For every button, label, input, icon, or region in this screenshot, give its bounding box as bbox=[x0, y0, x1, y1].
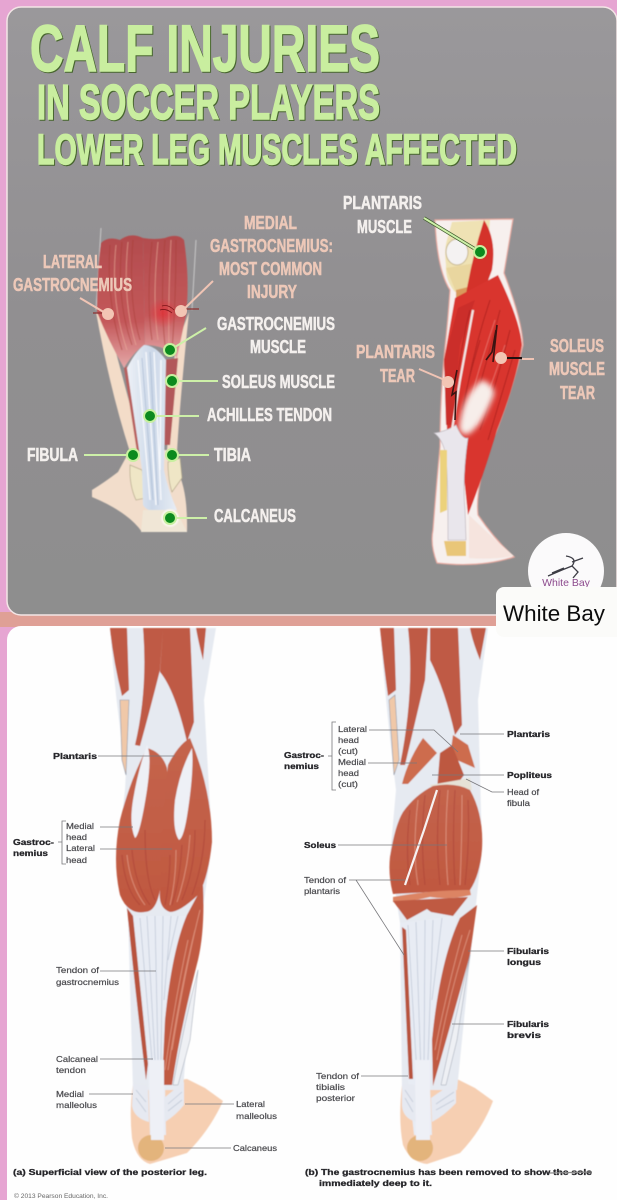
label: calcaneal tendon: tendon bbox=[56, 1065, 86, 1075]
callout: medial gastrocnemius: GASTROCNEMIUS: bbox=[210, 235, 333, 256]
label: gastrocnemius cut heads: (cut) bbox=[338, 746, 358, 756]
label: tendon of gastrocnemius: gastrocnemius bbox=[56, 977, 119, 987]
label: gastrocnemius bracket: Lateral bbox=[66, 843, 95, 853]
label: tendon of gastrocnemius bbox=[56, 965, 156, 987]
callout: medial gastrocnemius: INJURY bbox=[247, 281, 297, 302]
label: calcaneal tendon bbox=[56, 1054, 153, 1075]
label: gastrocnemius cut heads: nemius bbox=[284, 761, 319, 771]
white aponeurosis patch bbox=[459, 380, 494, 435]
logo: White Bay circle bbox=[528, 533, 604, 587]
callout: calcaneus: CALCANEUS bbox=[214, 505, 296, 526]
diagram: posterior lower leg bbox=[13, 212, 335, 532]
label: tendon of tibialis posterior bbox=[316, 1071, 408, 1103]
caption: view b bbox=[305, 1167, 592, 1188]
label: gastrocnemius cut heads: Gastroc- bbox=[284, 750, 324, 760]
label: gastrocnemius bracket: Gastroc- bbox=[13, 837, 54, 847]
label: plantaris right bbox=[460, 729, 550, 739]
panel: top grey infographic bbox=[7, 7, 617, 615]
callout: fibula: FIBULA bbox=[27, 444, 78, 465]
callout: tibia bbox=[166, 444, 251, 465]
callout: soleus muscle: SOLEUS MUSCLE bbox=[222, 371, 335, 392]
label: gastrocnemius cut heads: (cut) bbox=[338, 779, 358, 789]
label: fibularis longus bbox=[468, 946, 549, 967]
label: fibularis brevis: brevis bbox=[507, 1030, 541, 1040]
label: tendon of plantaris: plantaris bbox=[304, 886, 340, 896]
callout: achilles tendon: ACHILLES TENDON bbox=[207, 404, 332, 425]
label: fibularis brevis bbox=[452, 1019, 549, 1040]
callout: plantaris muscle bbox=[343, 192, 486, 258]
callout: soleus muscle tear bbox=[495, 335, 605, 403]
callout: tibia: TIBIA bbox=[214, 444, 251, 465]
callout: soleus muscle bbox=[166, 371, 335, 392]
title: CALF INJURIES bbox=[30, 11, 380, 85]
label: gastrocnemius cut heads: Medial bbox=[338, 757, 366, 767]
label: fibularis longus: Fibularis bbox=[507, 946, 549, 956]
callout: gastrocnemius muscle: MUSCLE bbox=[250, 336, 306, 357]
label: gastrocnemius bracket: head bbox=[66, 832, 87, 842]
label: medial malleolus: Medial bbox=[56, 1089, 84, 1099]
label: popliteus: Popliteus bbox=[507, 770, 552, 780]
label: tendon of plantaris: Tendon of bbox=[304, 875, 347, 885]
title: IN SOCCER PLAYERS bbox=[37, 76, 380, 130]
label: lateral malleolus: Lateral bbox=[236, 1099, 265, 1109]
callout: plantaris tear: TEAR bbox=[380, 365, 415, 386]
label: head of fibula: fibula bbox=[507, 798, 530, 808]
title bbox=[30, 11, 517, 174]
callout: lateral gastrocnemius: GASTROCNEMIUS bbox=[13, 274, 132, 295]
label: gastrocnemius cut heads: head bbox=[338, 735, 359, 745]
diagram: superficial posterior leg bbox=[13, 628, 277, 1200]
callout: medial gastrocnemius bbox=[175, 212, 333, 317]
label: tendon of tibialis posterior: tibialis bbox=[316, 1082, 345, 1092]
label: tendon of tibialis posterior: Tendon of bbox=[316, 1071, 360, 1081]
label: plantaris: Plantaris bbox=[53, 751, 97, 761]
logo: White Bay circle: White Bay bbox=[542, 577, 591, 589]
label: gastrocnemius cut heads: Lateral bbox=[338, 724, 367, 734]
label: gastrocnemius bracket: head bbox=[66, 855, 87, 865]
badge: White Bay label bbox=[496, 587, 617, 637]
label: medial malleolus: malleolus bbox=[56, 1100, 97, 1110]
label: calcaneus bbox=[165, 1143, 277, 1153]
label: tendon of gastrocnemius: Tendon of bbox=[56, 965, 100, 975]
callout: soleus muscle tear: TEAR bbox=[560, 382, 595, 403]
label: lateral malleolus bbox=[185, 1099, 277, 1121]
callout: medial gastrocnemius: MEDIAL bbox=[244, 212, 297, 233]
label: head of fibula bbox=[466, 779, 540, 808]
label: gastrocnemius bracket: nemius bbox=[13, 848, 48, 858]
label: calcaneal tendon: Calcaneal bbox=[56, 1054, 98, 1064]
diagram: gastrocnemius removed view bbox=[284, 628, 592, 1188]
label: lateral malleolus: malleolus bbox=[236, 1111, 277, 1121]
label: head of fibula: Head of bbox=[507, 787, 540, 797]
label: popliteus bbox=[432, 770, 552, 780]
label: tendon of tibialis posterior: posterior bbox=[316, 1093, 355, 1103]
caption: view b: (b) The gastrocnemius has been removed to show the sole bbox=[305, 1167, 592, 1177]
callout: achilles tendon bbox=[144, 404, 332, 425]
callout: lateral gastrocnemius: LATERAL bbox=[43, 251, 102, 272]
callout: plantaris muscle: PLANTARIS bbox=[343, 192, 422, 213]
label: tendon of plantaris bbox=[304, 875, 405, 955]
copyright: © 2013 Pearson Education, Inc. bbox=[14, 1192, 108, 1200]
caption: view a: (a) Superficial view of the posterior leg. bbox=[13, 1167, 207, 1177]
label: soleus: Soleus bbox=[304, 840, 336, 850]
salmon divider strip bbox=[0, 612, 500, 627]
label: gastrocnemius bracket bbox=[13, 821, 172, 865]
callout: calcaneus bbox=[164, 505, 296, 526]
label: gastrocnemius cut heads bbox=[284, 722, 458, 790]
label: fibularis brevis: Fibularis bbox=[507, 1019, 549, 1029]
caption: view b: immediately deep to it. bbox=[319, 1178, 432, 1188]
callout: plantaris tear: PLANTARIS bbox=[356, 341, 435, 362]
label: gastrocnemius cut heads: head bbox=[338, 768, 359, 778]
callout: medial gastrocnemius: MOST COMMON bbox=[219, 258, 322, 279]
callout: gastrocnemius muscle: GASTROCNEMIUS bbox=[217, 313, 335, 334]
callout: plantaris muscle: MUSCLE bbox=[357, 216, 412, 237]
callout: gastrocnemius muscle bbox=[164, 313, 335, 357]
label: calcaneus: Calcaneus bbox=[233, 1143, 277, 1153]
label: plantaris right: Plantaris bbox=[507, 729, 550, 739]
badge: White Bay label: White Bay bbox=[503, 601, 606, 626]
panel: bottom white anatomy chart bbox=[7, 626, 617, 1200]
callout: fibula bbox=[27, 444, 139, 465]
label: fibularis longus: longus bbox=[507, 957, 541, 967]
label: plantaris bbox=[53, 751, 175, 761]
diagram: side view of lower leg bbox=[343, 192, 605, 565]
label: medial malleolus bbox=[56, 1089, 133, 1110]
callout: plantaris tear bbox=[356, 341, 454, 388]
callout: lateral gastrocnemius bbox=[13, 251, 132, 320]
label: gastrocnemius bracket: Medial bbox=[66, 821, 94, 831]
